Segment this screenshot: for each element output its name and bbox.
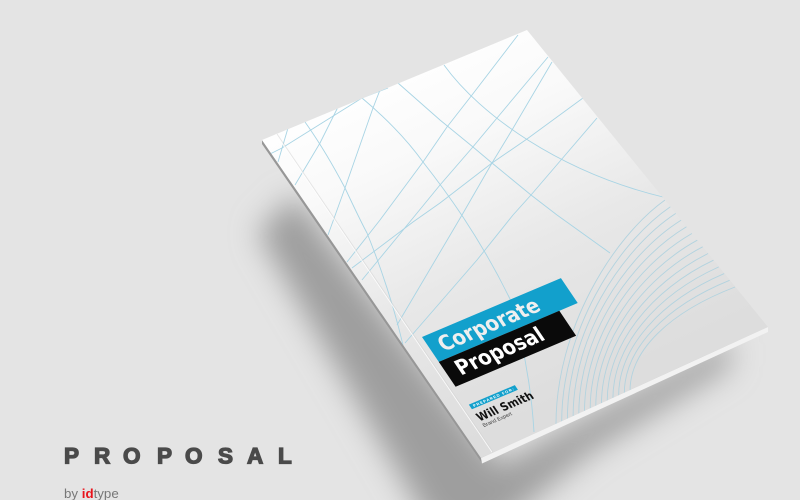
prepared for tag <box>469 385 518 409</box>
title: PROPOSAL <box>64 444 292 468</box>
book <box>262 30 768 464</box>
blue bar <box>422 278 578 362</box>
book spine edge <box>262 140 482 463</box>
corporate text: Corporate <box>433 294 546 357</box>
book shadow <box>258 195 730 500</box>
proposal text: Proposal <box>450 323 550 380</box>
prepared for text: PREPARED FOR: <box>472 387 515 408</box>
name: Will Smith <box>473 389 536 424</box>
cover line pattern <box>268 35 663 432</box>
concentric arcs <box>556 200 735 424</box>
black bar <box>439 311 576 387</box>
book bottom edge <box>481 327 768 464</box>
cover label block <box>422 278 623 429</box>
spine crease <box>276 134 493 452</box>
role: Brand Expert <box>482 411 514 429</box>
book cover <box>262 30 768 458</box>
